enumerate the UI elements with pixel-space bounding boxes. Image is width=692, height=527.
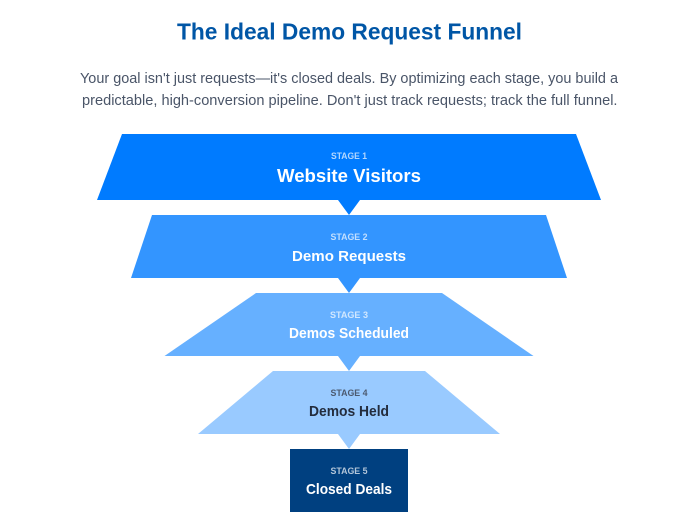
- stage 3 label: STAGE 3: [330, 310, 368, 321]
- funnel stage 5: Closed Deals: [290, 449, 408, 512]
- arrow: stage 2 to stage 3: [338, 278, 360, 293]
- stage 1 label: STAGE 1: [331, 151, 368, 162]
- funnel stage 4: Demos Held: [198, 371, 500, 449]
- stage 4 label: STAGE 4: [330, 388, 368, 399]
- intro paragraph: predictable, high-conversion pipeline. Don't just track requests; track the full funnel.: [82, 93, 618, 109]
- stage 1 name: Website Visitors: [277, 165, 421, 186]
- stage 4 name: Demos Held: [309, 403, 389, 420]
- arrow: stage 4 to stage 5: [338, 434, 360, 449]
- intro paragraph: Your goal isn't just requests—it's closed deals. By optimizing each stage, you build a: [80, 71, 619, 87]
- stage 5 name: Closed Deals: [306, 481, 392, 498]
- title: The Ideal Demo Request Funnel: [177, 18, 522, 44]
- stage 5 label: STAGE 5: [330, 466, 368, 477]
- funnel stage 3: Demos Scheduled: [164, 293, 534, 371]
- stage 3 name: Demos Scheduled: [289, 325, 409, 342]
- arrow: stage 3 to stage 4: [338, 356, 360, 371]
- intro paragraph: [80, 71, 619, 109]
- funnel stage 1: Website Visitors: [97, 134, 601, 215]
- stage 2 name: Demo Requests: [292, 248, 406, 265]
- stage 2 label: STAGE 2: [330, 232, 368, 243]
- arrow: stage 1 to stage 2: [338, 200, 360, 215]
- funnel stage 2: Demo Requests: [131, 215, 567, 293]
